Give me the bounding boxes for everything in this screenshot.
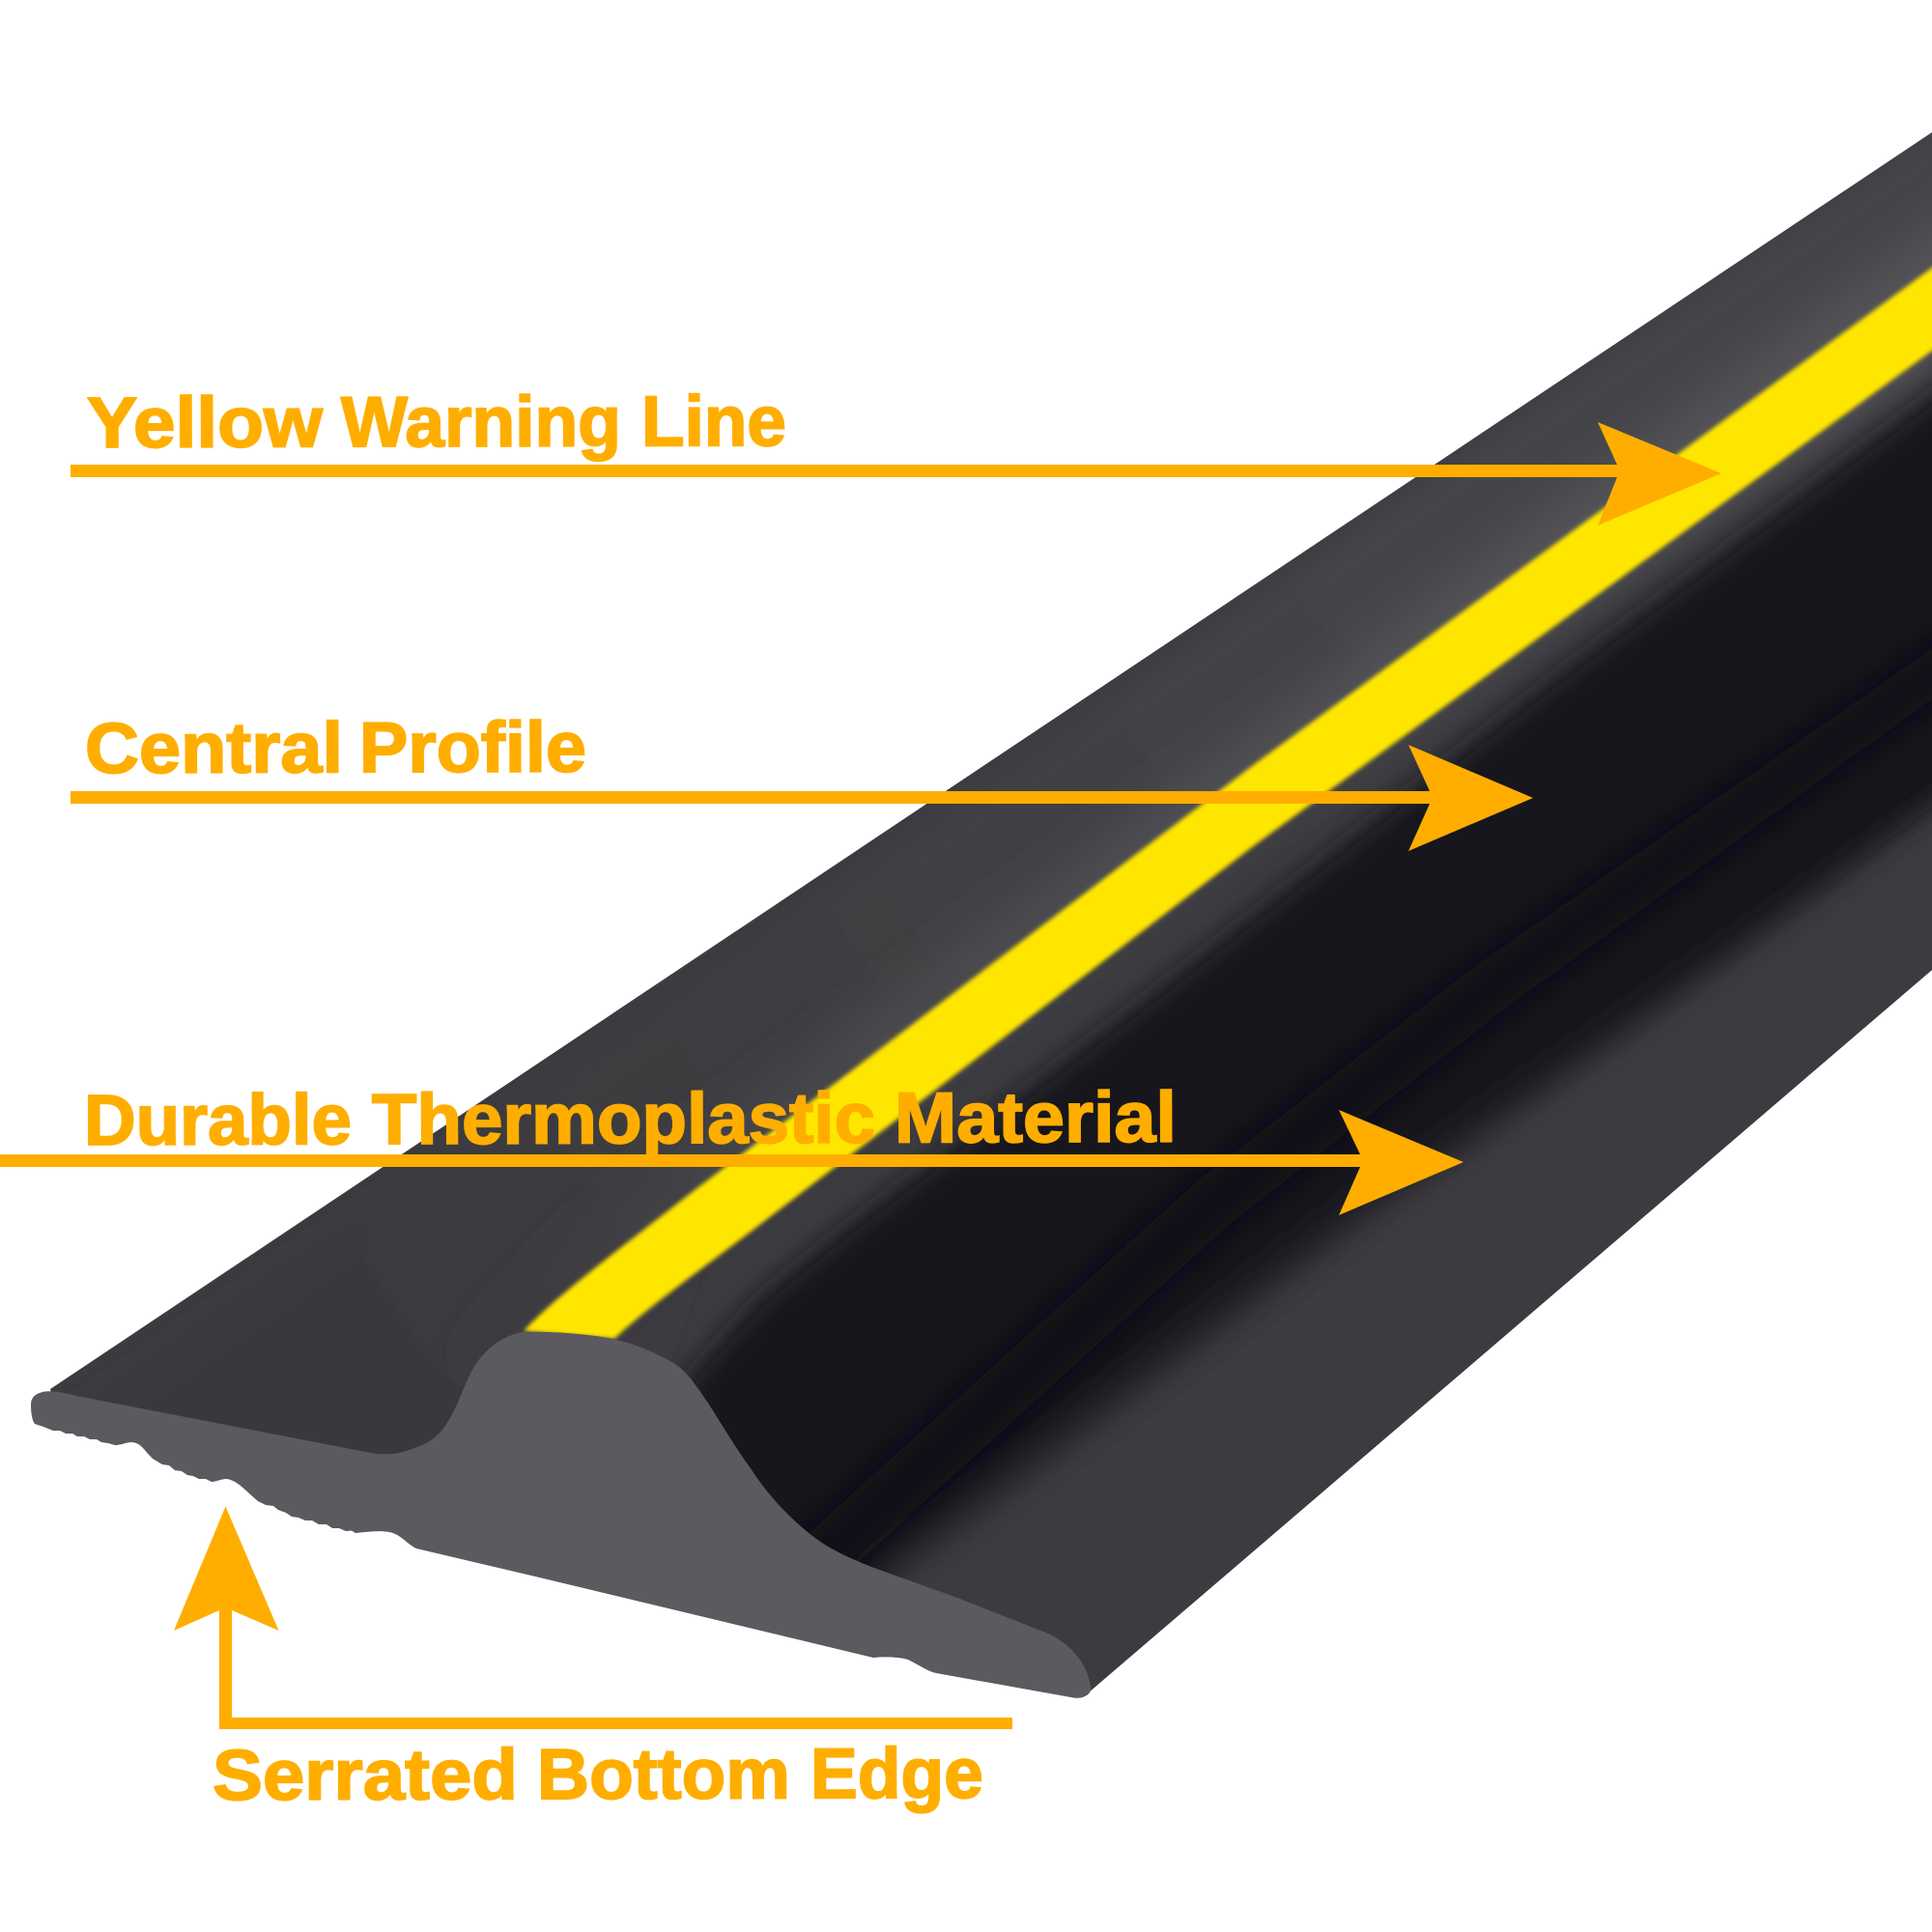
callout: central profile: [71, 707, 1533, 851]
label: serrated bottom edge: Bottom: [537, 1733, 790, 1814]
callout: durable thermoplastic material: [0, 1077, 1463, 1215]
label: durable thermoplastic material: Thermoplastic: [372, 1078, 875, 1159]
label: yellow warning line: Yellow: [87, 382, 324, 463]
arrow: serrated bottom edge elbow: [174, 1507, 1012, 1729]
callout: yellow warning line: [71, 381, 1721, 526]
label: durable thermoplastic material: Durable: [84, 1079, 352, 1160]
front cross-section profile with serrated underside: [31, 1332, 1091, 1698]
label: central profile: Central: [85, 707, 343, 788]
label: central profile: Profile: [359, 707, 586, 787]
yellow warning stripe: [524, 240, 1932, 1339]
callout: serrated bottom edge: [174, 1507, 1012, 1815]
label: serrated bottom edge: Serrated: [213, 1734, 518, 1815]
arrow: durable thermoplastic material: [0, 1110, 1463, 1215]
arrow: yellow warning line: [71, 422, 1721, 526]
label: durable thermoplastic material: Material: [895, 1077, 1177, 1158]
label: yellow warning line: Warning: [341, 382, 621, 462]
arrow: central profile: [71, 745, 1533, 851]
label: yellow warning line: Line: [641, 381, 786, 461]
label: serrated bottom edge: Edge: [810, 1733, 983, 1813]
